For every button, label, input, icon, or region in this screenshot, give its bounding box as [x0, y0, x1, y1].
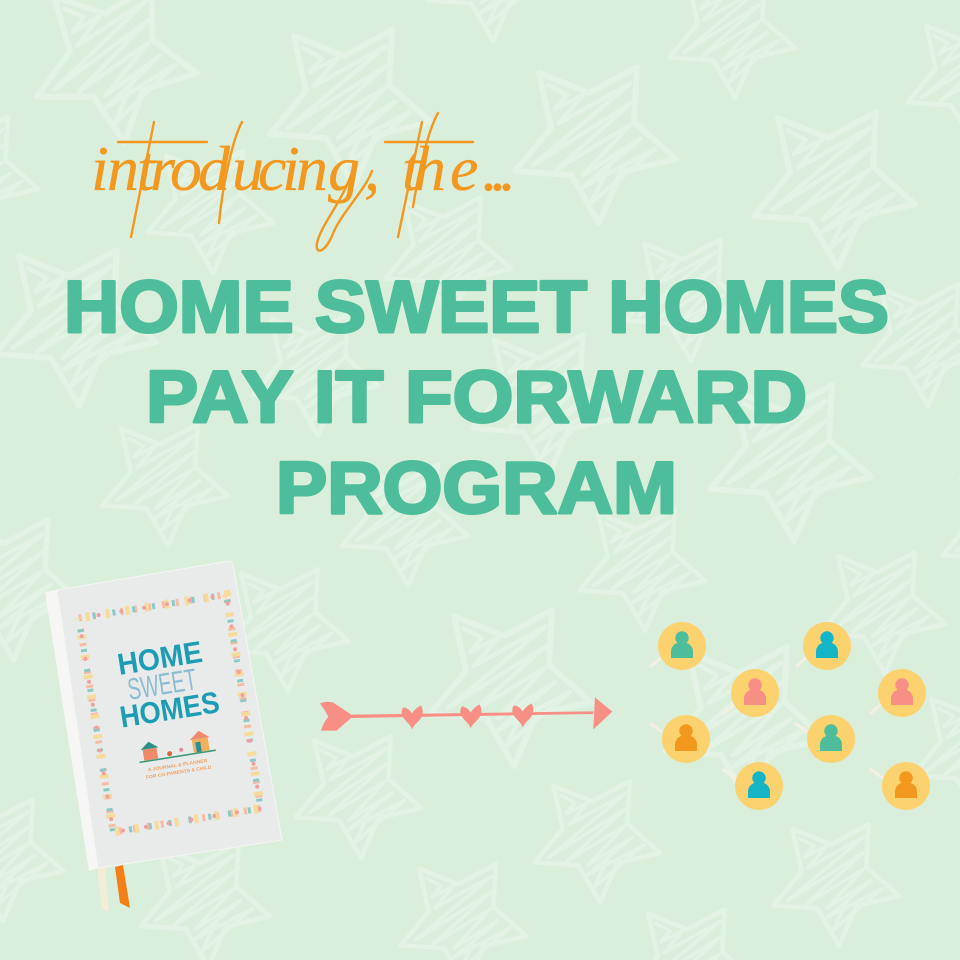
heading line 1: HOME SWEET HOMES — [64, 267, 889, 348]
heading line 2: PAY IT FORWARD — [146, 357, 807, 438]
person: orange bottom right — [882, 762, 930, 810]
person: teal bottom — [735, 762, 783, 810]
book — [45, 561, 282, 912]
book cover — [57, 561, 282, 868]
book spine — [45, 590, 98, 871]
person: pink right — [878, 669, 926, 717]
heart 1 — [402, 705, 423, 729]
main heading — [64, 267, 889, 529]
cover title: SWEET — [125, 663, 199, 707]
heart 3 — [512, 703, 533, 727]
arrow tail — [320, 702, 353, 731]
heart 2 — [460, 704, 481, 728]
person: green centre — [807, 715, 855, 763]
arrow head — [593, 697, 612, 729]
heading line 3: PROGRAM — [276, 448, 677, 529]
icon border — [79, 595, 261, 832]
ribbon: orange — [115, 865, 130, 908]
cover title — [109, 634, 222, 735]
person: green top left — [658, 622, 706, 670]
person: orange left — [662, 715, 710, 763]
script intro: introducing, the...: introducing, the... — [91, 133, 516, 204]
cover tagline — [145, 757, 212, 780]
connector tails — [650, 657, 883, 778]
arrow shaft — [352, 711, 593, 718]
arrow with hearts — [320, 697, 612, 731]
ribbon: cream — [97, 868, 109, 912]
person: pink middle — [731, 669, 779, 717]
cover artwork — [79, 595, 261, 832]
people network — [650, 622, 930, 810]
cover houses — [136, 729, 216, 763]
cover tagline: FOR CO-PARENTS & CHILD — [146, 764, 212, 780]
cover title: HOMES — [118, 686, 222, 735]
cover title: HOME — [115, 636, 205, 682]
person: teal top — [803, 622, 851, 670]
cover tagline: A JOURNAL & PLANNER — [147, 758, 208, 772]
script intro: introducing, the... — [91, 113, 516, 251]
